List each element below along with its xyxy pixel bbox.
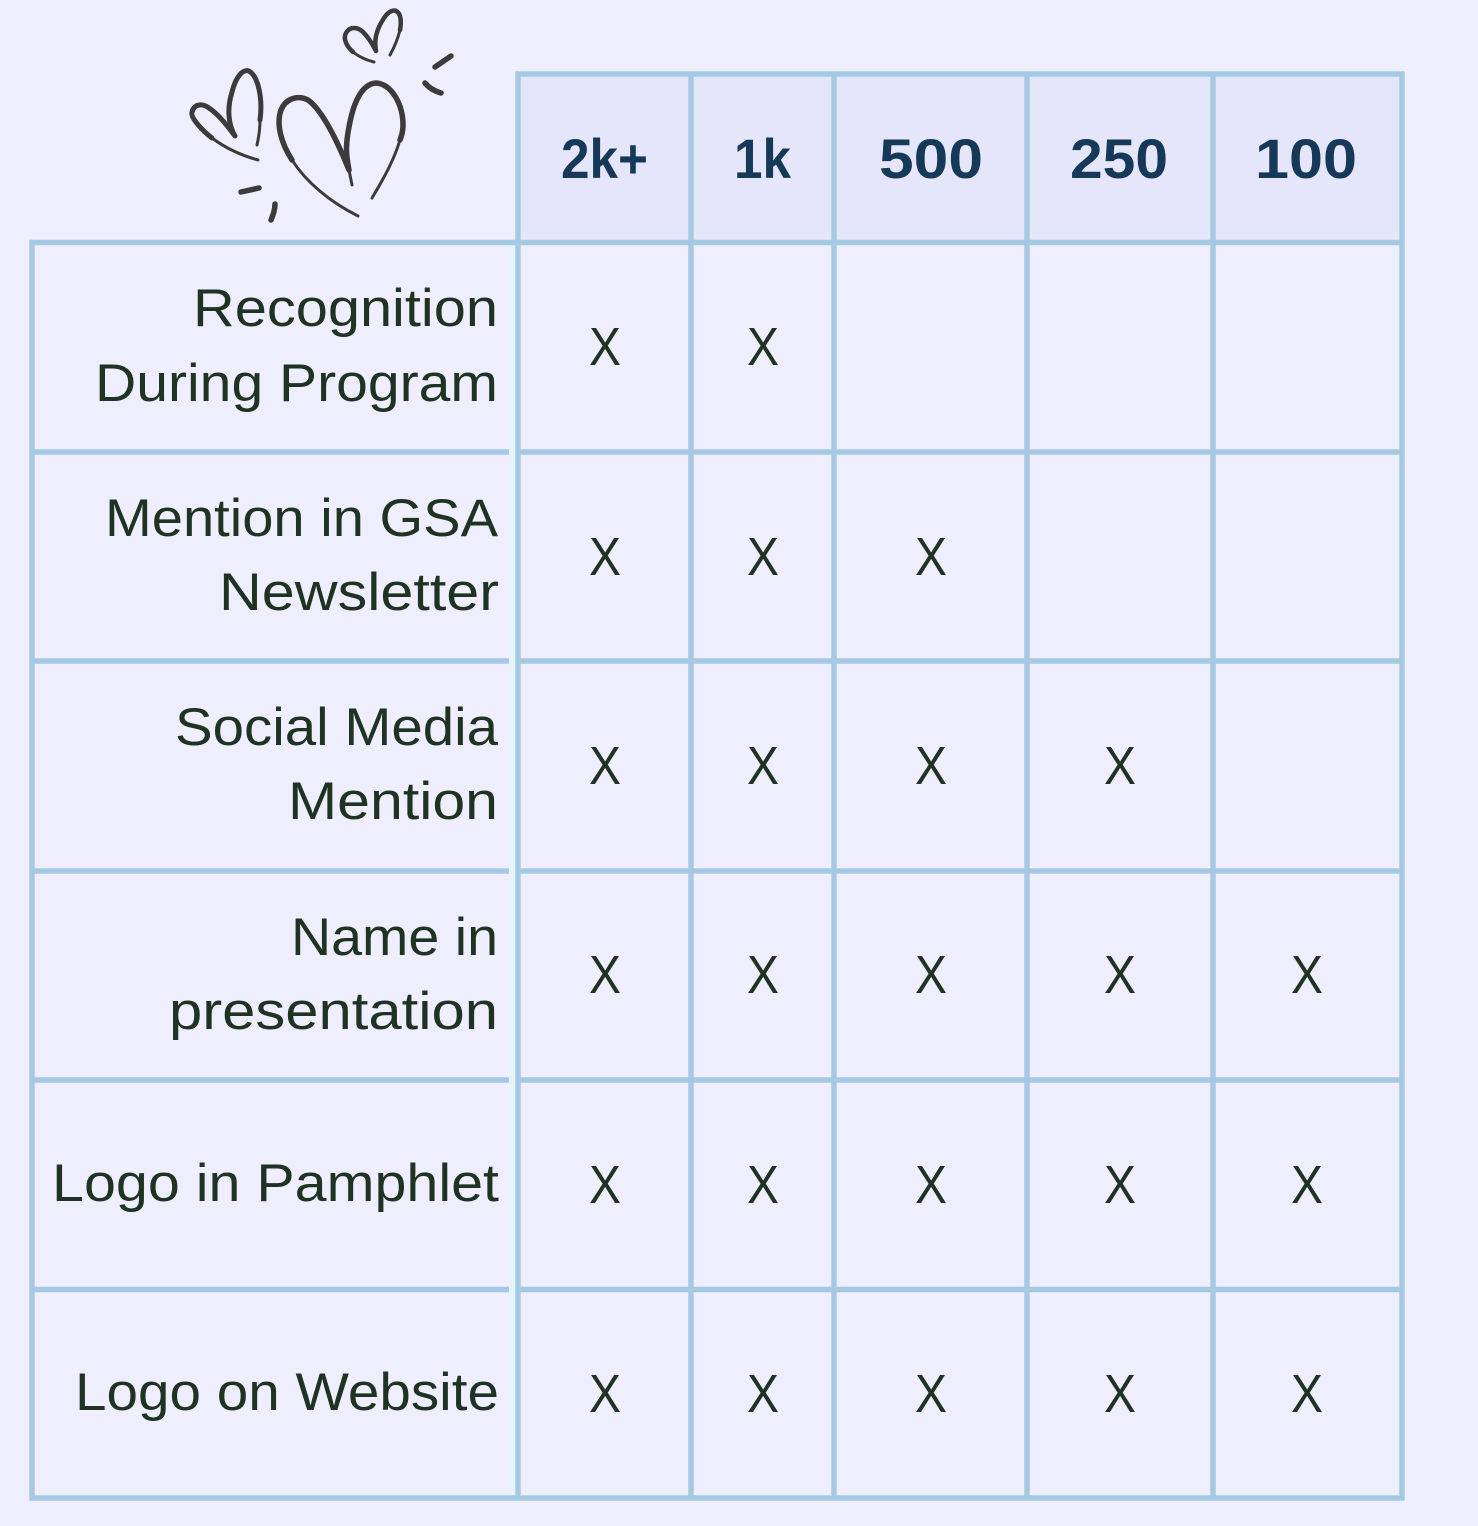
icon: hand-drawn hearts: [192, 11, 451, 220]
row: Recognition During Program: Recognition: [193, 279, 498, 338]
row: Mention in GSA Newsletter: X: [747, 527, 779, 587]
header: 500: 500: [879, 127, 983, 190]
row: Name in presentation: X: [915, 945, 947, 1005]
row: Social Media Mention: Mention: [288, 772, 498, 831]
row: Logo in Pamphlet: [52, 1154, 1323, 1215]
row: Name in presentation: X: [1104, 945, 1136, 1005]
row: Logo in Pamphlet: X: [915, 1155, 947, 1215]
row: Name in presentation: X: [1291, 945, 1323, 1005]
row: Mention in GSA Newsletter: X: [589, 527, 621, 587]
row: Logo on Website: X: [589, 1364, 621, 1424]
row: Logo on Website: X: [747, 1364, 779, 1424]
row: Logo on Website: X: [1291, 1364, 1323, 1424]
row: Logo in Pamphlet: Logo in Pamphlet: [52, 1154, 499, 1213]
header: 250: 250: [1070, 127, 1168, 190]
table header row: [518, 74, 1402, 242]
row: Name in presentation: presentation: [169, 982, 498, 1041]
row: Mention in GSA Newsletter: [105, 489, 947, 622]
row: Logo in Pamphlet: X: [1291, 1155, 1323, 1215]
row: Logo in Pamphlet: X: [589, 1155, 621, 1215]
row: Logo on Website: [75, 1363, 1323, 1424]
row: Recognition During Program: X: [747, 317, 779, 377]
row: Name in presentation: [169, 908, 1323, 1041]
row: Logo on Website: Logo on Website: [75, 1363, 499, 1422]
row: Social Media Mention: [175, 698, 1136, 831]
header: 1k: 1k: [734, 127, 792, 190]
header: 2k+: 2k+: [561, 127, 648, 190]
row: Logo on Website: X: [1104, 1364, 1136, 1424]
row: Name in presentation: Name in: [291, 908, 498, 967]
row: Social Media Mention: X: [915, 736, 947, 796]
row: Social Media Mention: X: [1104, 736, 1136, 796]
row: Social Media Mention: Social Media: [175, 698, 499, 757]
row: Mention in GSA Newsletter: Mention in GSA: [105, 489, 499, 548]
row: Social Media Mention: X: [589, 736, 621, 796]
row: Recognition During Program: [95, 279, 779, 413]
row: Name in presentation: X: [747, 945, 779, 1005]
row: Mention in GSA Newsletter: Newsletter: [219, 563, 499, 622]
row: Logo in Pamphlet: X: [1104, 1155, 1136, 1215]
row: Logo in Pamphlet: X: [747, 1155, 779, 1215]
row: Logo on Website: X: [915, 1364, 947, 1424]
header: 100: 100: [1255, 127, 1357, 190]
row: Mention in GSA Newsletter: X: [915, 527, 947, 587]
row: Social Media Mention: X: [747, 736, 779, 796]
row: Name in presentation: X: [589, 945, 621, 1005]
row: Recognition During Program: During Program: [95, 354, 498, 413]
row: Recognition During Program: X: [589, 317, 621, 377]
